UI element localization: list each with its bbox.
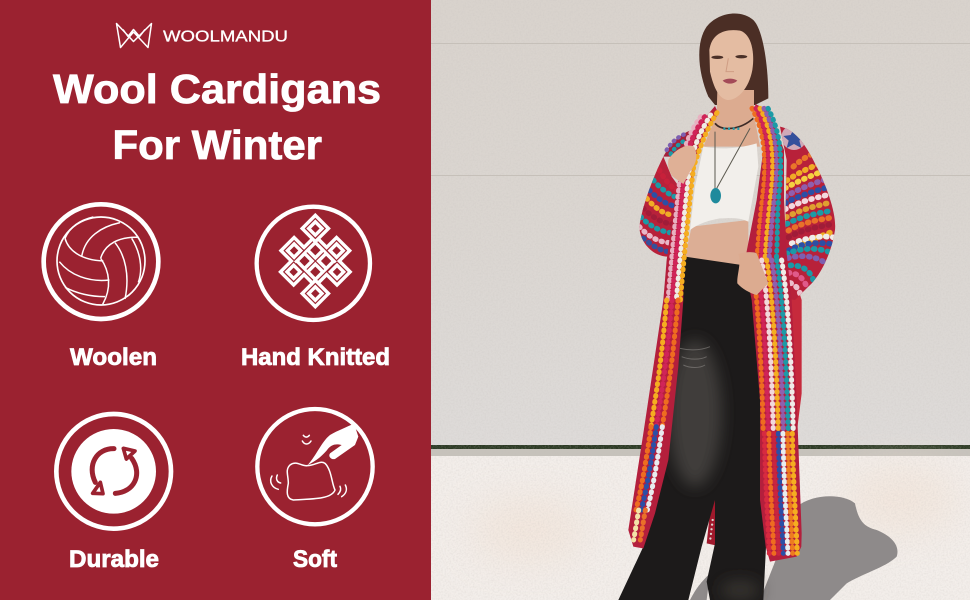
panel: brand and features [0,0,431,600]
logo wordmark: WOOLMANDU [163,28,288,46]
feature: durable [56,414,171,573]
left sleeve [639,130,690,257]
wide black jeans [618,253,767,600]
icon: recycle arrows in disc [56,414,171,529]
midriff [685,220,748,265]
ground [431,445,970,600]
photo: model wearing cardigan [431,0,970,600]
white crop top [690,143,758,230]
title [53,66,381,168]
coat back red strip [792,295,802,426]
logo [116,24,288,48]
label: soft: Soft [293,546,337,573]
icon: volleyball-style yarn ball [44,204,158,319]
left hand at collar [668,146,696,184]
label: hand knitted: Hand Knitted [241,344,390,371]
logo mark [116,24,152,48]
right collar band [744,104,802,562]
icon: finger pressing soft fabric [257,409,373,524]
wall background [431,0,970,456]
title: Wool Cardigans [53,66,381,112]
feature: hand knitted [241,207,390,371]
right hand on coat [737,252,768,295]
necklaces and pendant [710,118,753,203]
left collar band [628,106,718,548]
title: For Winter [112,122,322,168]
feature: woolen [44,204,158,371]
label: woolen: Woolen [70,344,157,371]
back of coat between legs [706,500,715,546]
label: durable: Durable [69,546,159,573]
cast shadow [690,496,897,600]
right sleeve [780,126,836,300]
icon: endless knot [257,207,370,320]
feature: soft [257,409,373,573]
head and hair [699,13,768,147]
